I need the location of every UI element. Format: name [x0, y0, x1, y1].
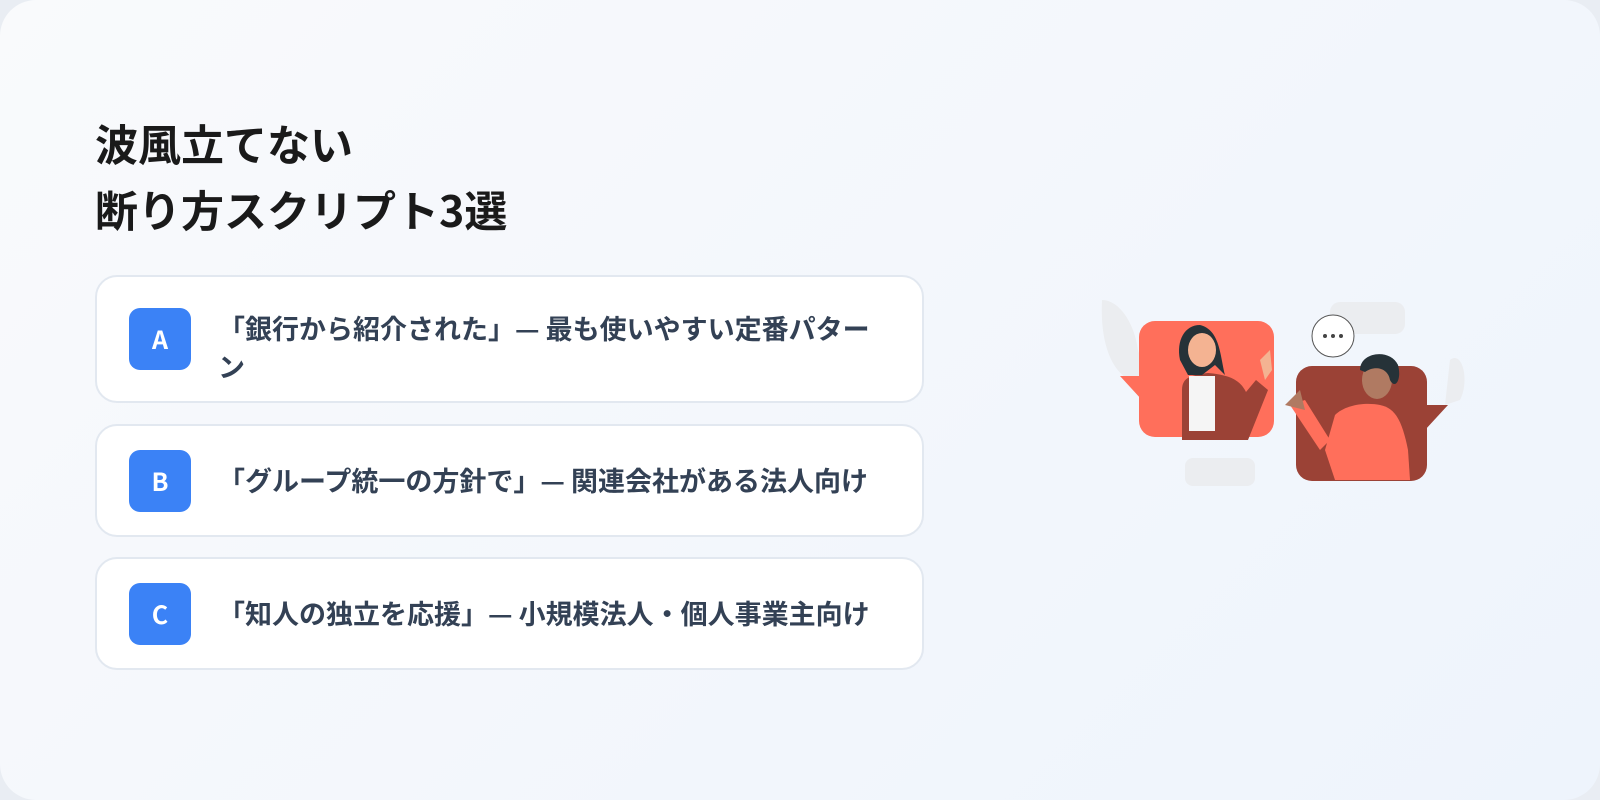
speech dots bubble	[1312, 315, 1354, 357]
badge C: C	[152, 596, 168, 632]
decorative leaves and bubbles	[1102, 300, 1465, 486]
text C: 「知人の独立を応援」— 小規模法人・個人事業主向け	[218, 593, 870, 632]
card A	[95, 275, 924, 403]
left bubble	[1120, 321, 1274, 440]
text A: 「銀行から紹介された」— 最も使いやすい定番パターン	[218, 308, 870, 385]
badge C	[129, 583, 191, 645]
badge A: A	[152, 321, 168, 357]
man	[1325, 404, 1410, 480]
illustration: two people talking	[1102, 300, 1464, 486]
title: 波風立てない	[95, 112, 353, 174]
badge B: B	[151, 463, 169, 499]
text B: 「グループ統一の方針で」— 関連会社がある法人向け	[218, 460, 868, 499]
card B	[95, 424, 924, 537]
badge B	[129, 450, 191, 512]
woman	[1182, 373, 1268, 440]
right bubble	[1285, 354, 1448, 481]
title: 断り方スクリプト3選	[95, 178, 507, 240]
badge A	[129, 308, 191, 370]
card C	[95, 557, 924, 670]
title	[95, 112, 507, 240]
